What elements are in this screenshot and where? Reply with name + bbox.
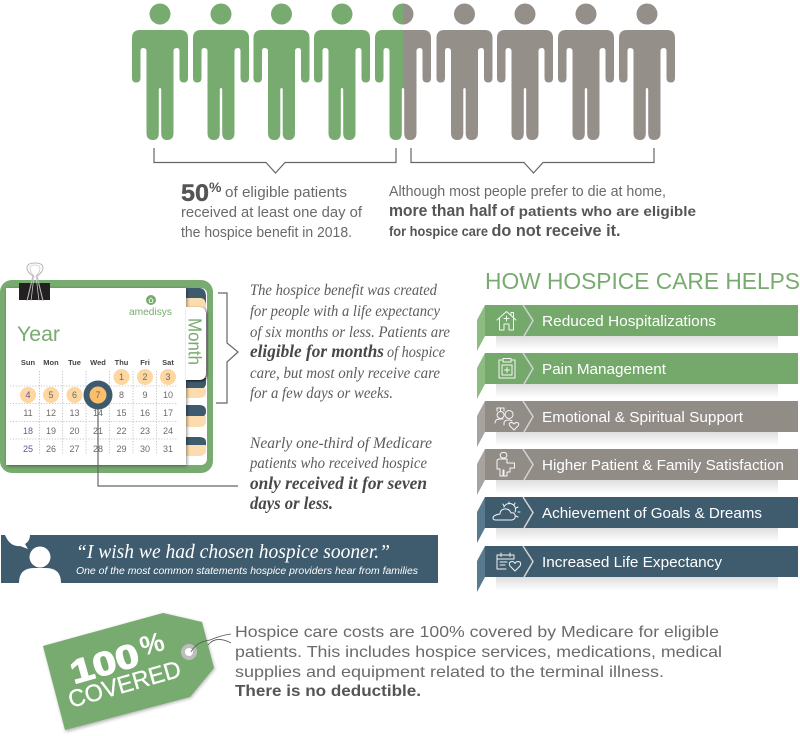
calendar (0, 263, 213, 473)
ribbon: achievement of goals and dreams: Achievement of Goals & Dreams (542, 505, 762, 522)
text: 50 percent received hospice: the hospice benefit in 2018. (181, 225, 352, 241)
date numbers: 19 (46, 426, 56, 436)
date numbers: 7 (95, 390, 101, 400)
date numbers: 30 (140, 444, 150, 454)
text: 50 percent received hospice: % (209, 179, 222, 195)
date numbers: 3 (165, 372, 171, 382)
text: 50 percent received hospice (181, 179, 363, 241)
text: one third received seven days or less: patients who received hospice (249, 455, 427, 472)
date grid (10, 371, 177, 455)
text: more than half do not receive it: do not receive it. (492, 222, 620, 240)
bracket: grey half (411, 148, 654, 173)
ribbon: emotional and spiritual support: Emotional & Spiritual Support (542, 409, 744, 426)
connector line from day seven (98, 409, 238, 486)
icon: house with cross (497, 312, 516, 330)
text: 50 percent received hospice: 50 (181, 180, 209, 207)
text: more than half do not receive it: more than half (389, 202, 497, 220)
tag label: COVERED (65, 656, 184, 714)
icon: cloud and sun (493, 502, 520, 520)
amedisys logo: amedisys (129, 306, 172, 318)
weekday labels: Sun (21, 358, 35, 367)
date numbers (23, 372, 173, 454)
text: hospice benefit eligibility: eligible for months (250, 341, 384, 361)
weekday labels: Fri (140, 358, 150, 367)
date numbers: 18 (23, 426, 33, 436)
weekday labels: Thu (115, 358, 129, 367)
ribbon: increased life expectancy: Increased Life Expectancy (542, 554, 723, 571)
ribbon: reduced hospitalizations: Reduced Hospitalizations (542, 313, 716, 330)
price tag: 100% covered (43, 613, 231, 732)
date numbers: 4 (25, 390, 31, 400)
highlighted days one through six (20, 369, 176, 403)
weekday labels: Tue (68, 358, 81, 367)
ribbon: increased life expectancy (477, 546, 798, 592)
text: hospice costs covered by Medicare: There is no deductible. (235, 683, 421, 700)
text: more than half do not receive it: of patients who are eligible (500, 204, 697, 219)
tag string (191, 634, 231, 652)
date numbers: 16 (140, 408, 150, 418)
date numbers: 22 (116, 426, 127, 436)
text: more than half do not receive it: for hospice care (389, 224, 488, 239)
date numbers: 24 (163, 426, 173, 436)
bracket: green half (154, 148, 396, 173)
tag body (43, 613, 214, 730)
text: hospice benefit eligibility: for a few days or weeks. (250, 385, 393, 402)
bracket: calendar to benefit text (216, 293, 238, 403)
text: 50 percent received hospice: of eligible patients (225, 185, 347, 201)
calendar heading: Year: Year (17, 323, 60, 346)
text: hospice benefit eligibility: of six months or less. Patients are (250, 324, 450, 341)
amedisys logo (129, 295, 172, 318)
date numbers: 27 (69, 444, 80, 454)
date numbers: 31 (163, 444, 173, 454)
text: one third received seven days or less: days or less. (250, 493, 333, 513)
text: hospice costs covered by Medicare: Hospice care costs are 100% covered by Medicare for eligible (235, 624, 719, 641)
quote text: “I wish we had chosen hospice sooner.” (76, 541, 390, 563)
date numbers: 11 (23, 408, 33, 418)
tag shadow (44, 614, 215, 732)
date numbers: 8 (119, 390, 124, 400)
ribbon: higher patient and family satisfaction (477, 449, 798, 495)
date numbers: 28 (93, 444, 103, 454)
pictogram: ten people, half green half grey (132, 4, 675, 140)
icon: person with cross (497, 452, 514, 476)
ribbon: achievement of goals and dreams (477, 497, 798, 543)
text: hospice benefit eligibility: The hospice benefit was created (250, 282, 437, 299)
month tab (184, 307, 206, 380)
ribbon: reduced hospitalizations (477, 305, 798, 351)
weekday labels (21, 358, 174, 367)
text: 50 percent received hospice: received at least one day of (181, 205, 363, 221)
date numbers: 13 (69, 408, 80, 418)
text: hospice benefit eligibility (250, 282, 450, 402)
weekday labels: Wed (90, 358, 106, 367)
text: hospice costs covered by Medicare: supplies and equipment related to the terminal illness. (235, 664, 664, 681)
date numbers: 15 (116, 408, 127, 418)
ribbon: emotional and spiritual support (477, 401, 798, 447)
tag eyelet (181, 644, 197, 660)
date numbers: 10 (163, 390, 173, 400)
date numbers: 14 (93, 408, 103, 418)
date numbers: 1 (119, 372, 124, 382)
date numbers: 2 (142, 372, 148, 382)
icon: clipboard with cross (499, 358, 515, 378)
text: one third received seven days or less: Nearly one-third of Medicare (249, 435, 432, 452)
month tab: Month (184, 318, 204, 365)
icon: person with speech bubble (5, 535, 61, 583)
text: one third received seven days or less (249, 435, 432, 513)
day seven marker (84, 380, 112, 410)
text: hospice benefit eligibility: care, but most only receive care (250, 365, 440, 382)
date numbers: 21 (93, 426, 103, 436)
text: more than half do not receive it (389, 184, 697, 240)
calendar tabs (170, 288, 207, 465)
text: more than half do not receive it: Although most people prefer to die at home, (389, 184, 666, 200)
date numbers: 29 (116, 444, 127, 454)
weekday labels: Sat (162, 358, 174, 367)
date numbers: 17 (163, 408, 173, 418)
text: one third received seven days or less: only received it for seven (250, 473, 427, 493)
tag label: % (136, 626, 168, 662)
tag label: 100 (66, 636, 143, 691)
date numbers: 26 (46, 444, 56, 454)
binder clip (19, 263, 50, 301)
date numbers: 6 (72, 390, 77, 400)
quote attribution: One of the most common statements hospice providers hear from families (76, 565, 419, 577)
text: hospice benefit eligibility: for people with a life expectancy (250, 303, 440, 320)
ribbon: higher patient and family satisfaction: Higher Patient & Family Satisfaction (542, 457, 784, 474)
calendar frame (0, 280, 213, 473)
icon: calendar with heart (497, 553, 521, 571)
text: hospice costs covered by Medicare: patients. This includes hospice services, medications, medical (235, 644, 722, 661)
icon: caregivers and heart (495, 408, 519, 430)
calendar page (6, 288, 186, 465)
date numbers: 9 (142, 390, 148, 400)
date numbers: 23 (140, 426, 150, 436)
weekday labels: Mon (43, 358, 59, 367)
text: hospice costs covered by Medicare (235, 624, 722, 700)
date numbers: 12 (46, 408, 56, 418)
date numbers: 5 (48, 390, 54, 400)
quote banner (1, 535, 438, 583)
ribbon: pain management: Pain Management (542, 361, 667, 378)
date numbers: 20 (69, 426, 80, 436)
text: hospice benefit eligibility: of hospice (387, 344, 445, 361)
date numbers: 25 (23, 444, 33, 454)
heading: how hospice care helps: HOW HOSPICE CARE HELPS (485, 268, 800, 294)
ribbon: pain management (477, 353, 798, 399)
tag label (65, 626, 184, 714)
